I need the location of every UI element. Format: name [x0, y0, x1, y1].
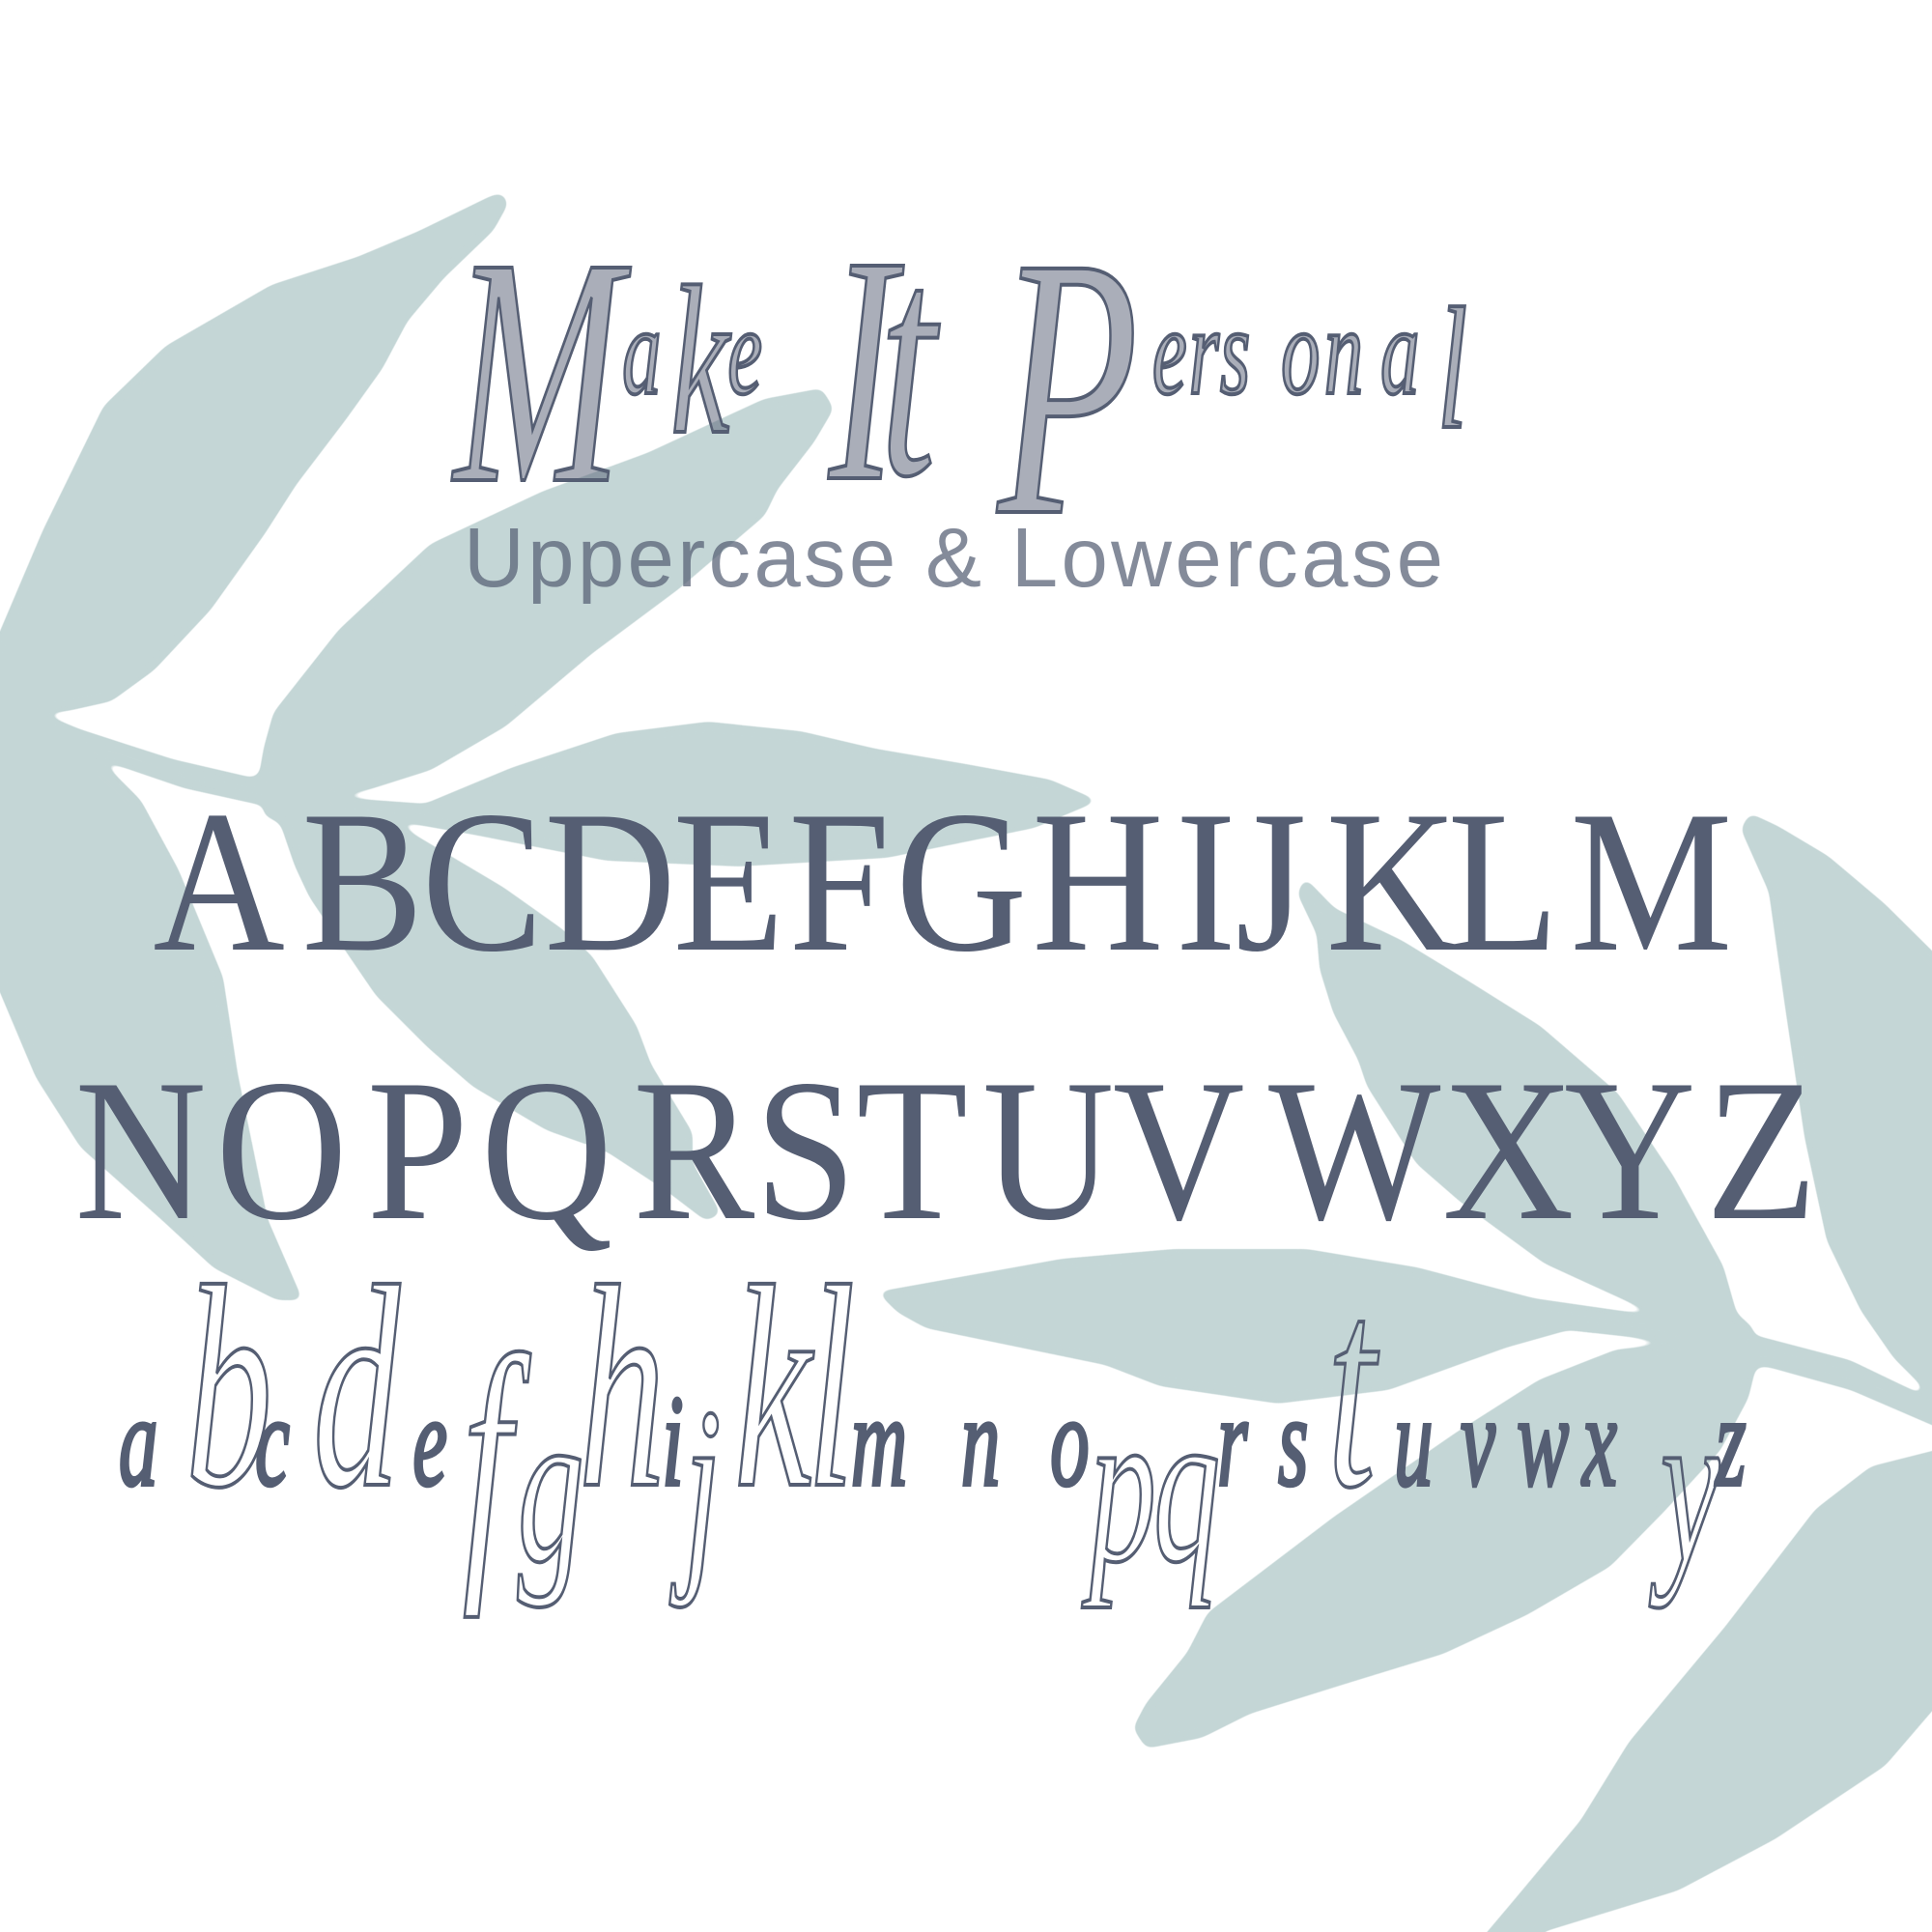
lowercase alphabet: x [1581, 1370, 1617, 1514]
uppercase alphabet: A to M: ABCDEFGHIJKLM [153, 770, 1732, 994]
uppercase alphabet: N to Z: NOPQRSTUVWXYZ [74, 1038, 1817, 1263]
title: k [670, 242, 731, 478]
lowercase alphabet: l [807, 1227, 855, 1548]
lowercase alphabet: g [518, 1363, 584, 1609]
lowercase alphabet: y [1649, 1363, 1720, 1609]
lowercase alphabet: q [1153, 1363, 1220, 1609]
lowercase alphabet: i [662, 1370, 684, 1514]
lowercase alphabet: e [412, 1370, 447, 1514]
lowercase alphabet: t [1327, 1227, 1379, 1548]
title: r [1189, 283, 1220, 421]
title: a [622, 283, 661, 421]
title: o [1281, 283, 1320, 421]
lowercase alphabet: h [579, 1227, 666, 1548]
title: M [451, 192, 633, 551]
title: l [1437, 273, 1467, 466]
leaves: right branch [879, 814, 1932, 1747]
lowercase alphabet: z [1715, 1370, 1747, 1514]
lowercase alphabet: c [255, 1370, 290, 1514]
lowercase alphabet: n [961, 1370, 1000, 1514]
lowercase alphabet: f [463, 1297, 531, 1618]
title: s [1220, 283, 1250, 421]
lowercase alphabet: p [1081, 1363, 1156, 1609]
lowercase alphabet: o [1050, 1370, 1090, 1514]
title: e [1152, 283, 1187, 421]
lowercase alphabet: b [185, 1227, 272, 1548]
lowercase alphabet: j [669, 1363, 721, 1609]
title: a [1380, 283, 1419, 421]
title: P [994, 183, 1139, 593]
lowercase alphabet: d [313, 1227, 401, 1548]
title: e [727, 283, 781, 421]
title: n [1324, 283, 1363, 421]
title: I [826, 190, 904, 549]
lowercase alphabet: r [1217, 1370, 1248, 1514]
lowercase alphabet: u [1394, 1370, 1433, 1514]
lowercase alphabet: s [1278, 1370, 1309, 1514]
lowercase alphabet: w [1517, 1370, 1569, 1514]
lowercase alphabet: k [734, 1227, 814, 1548]
lowercase alphabet: v [1461, 1370, 1495, 1514]
leaf: bottom right [1439, 1437, 1932, 1932]
lowercase alphabet: a [119, 1370, 157, 1514]
lowercase alphabet: m [851, 1370, 907, 1514]
title: t [880, 185, 986, 544]
subtitle: Uppercase & Lowercase [464, 511, 1443, 605]
leaves: left branch [0, 194, 1096, 1299]
